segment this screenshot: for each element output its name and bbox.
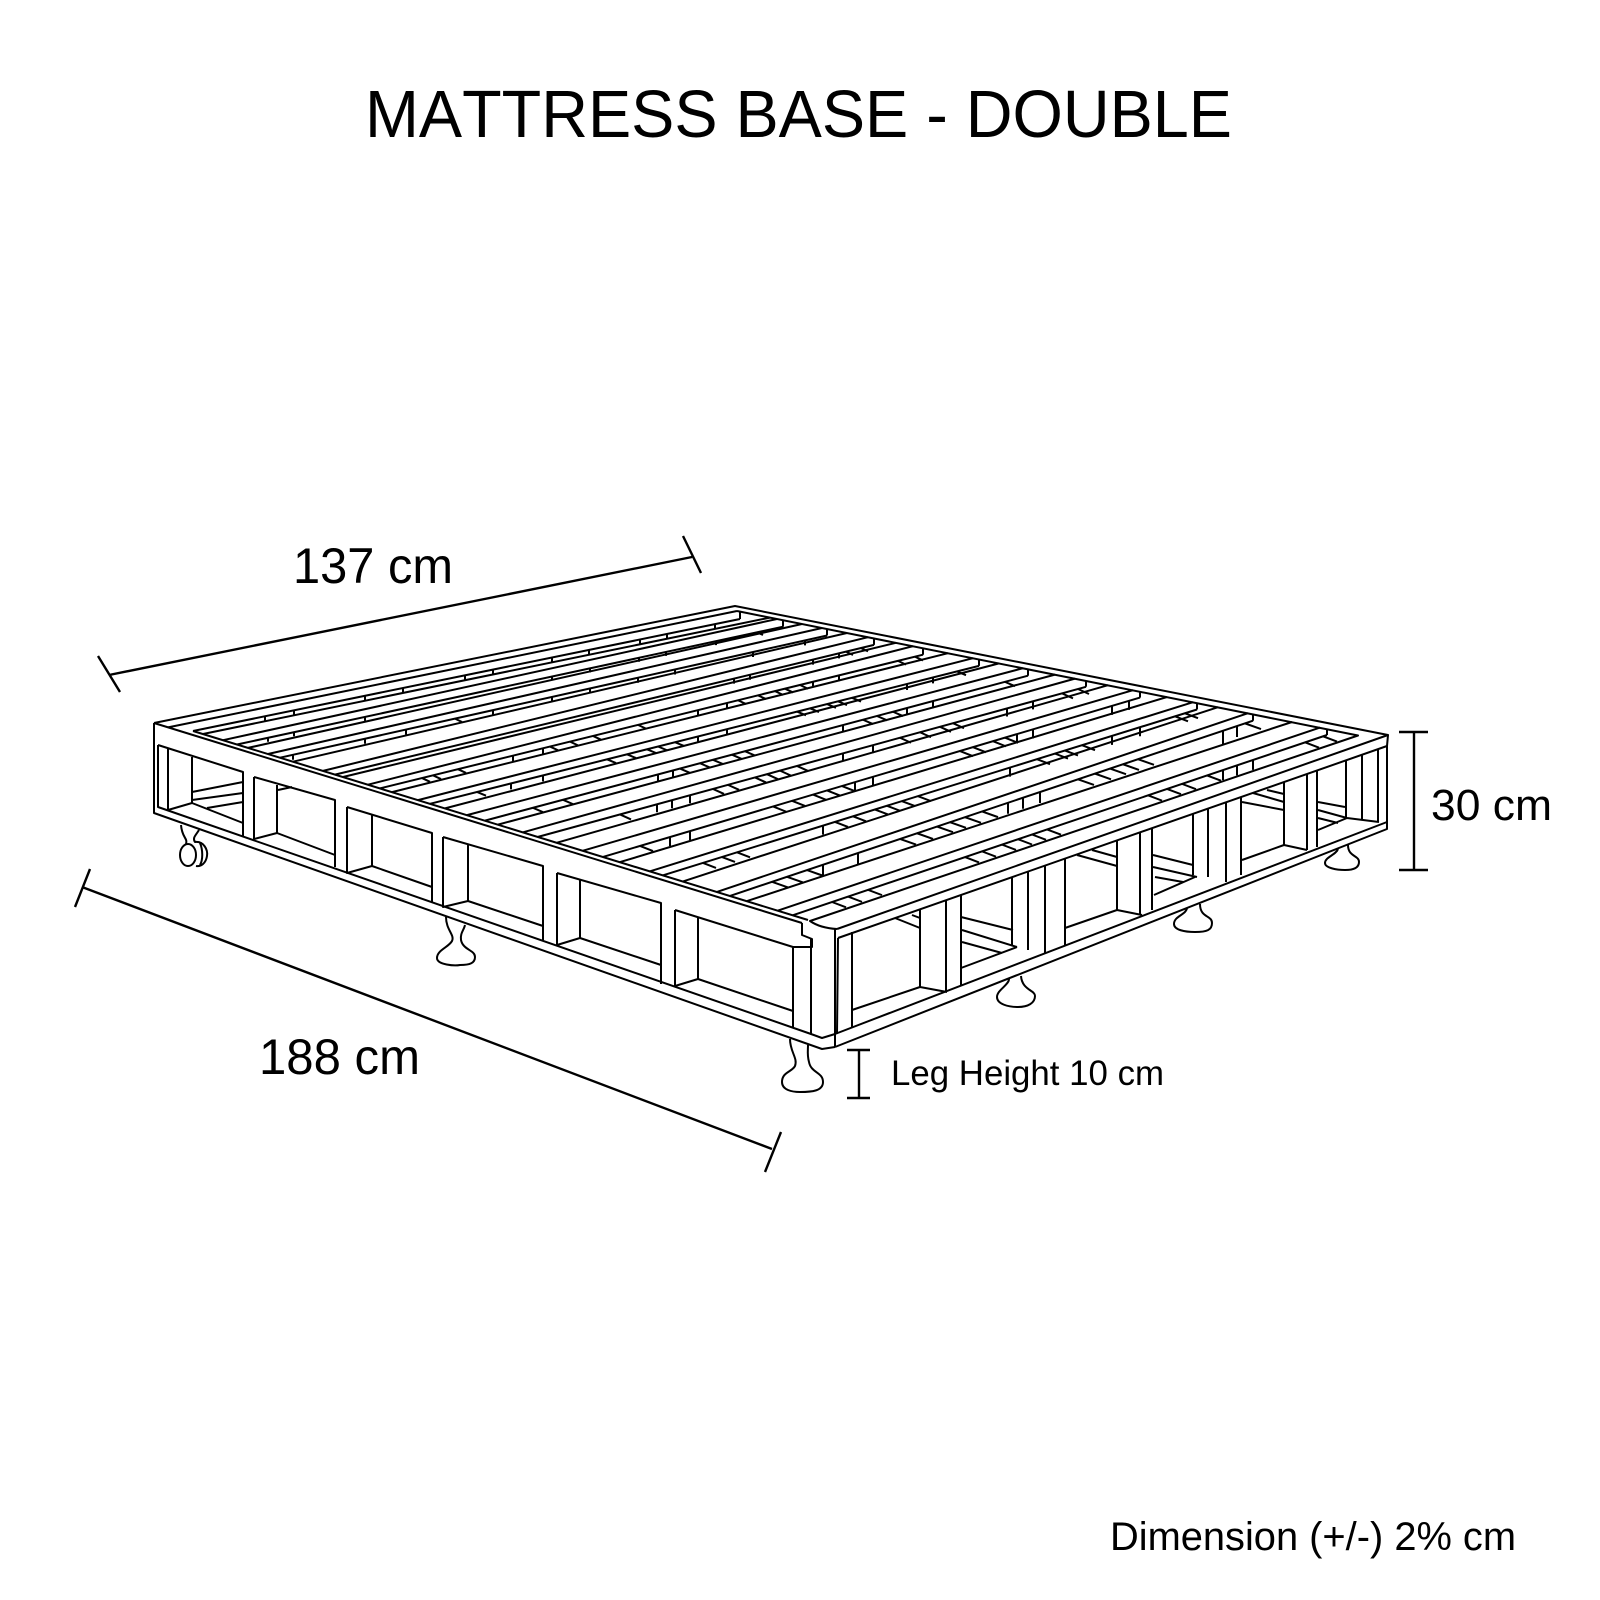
slat row 2 (223, 619, 802, 748)
slat row 8 (523, 679, 1108, 843)
leg: left side (437, 917, 475, 965)
slat row 4 (323, 637, 896, 777)
length label: 188 cm (259, 1029, 420, 1085)
height dimension line (1399, 732, 1428, 870)
title: MATTRESS BASE - DOUBLE (365, 77, 1232, 152)
slat row 3 (268, 628, 847, 762)
front corner post (793, 923, 838, 1047)
leg: right side middle (1174, 904, 1212, 932)
slat row 10 (650, 702, 1218, 881)
leg: right side near (997, 976, 1035, 1007)
leg height dimension line (847, 1050, 870, 1098)
leg height label: Leg Height 10 cm (891, 1054, 1164, 1093)
leg: front corner (782, 1039, 823, 1092)
dimension tolerance note: Dimension (+/-) 2% cm (1110, 1515, 1516, 1559)
caster wheel leg (180, 825, 207, 866)
slat row 11 (717, 713, 1292, 901)
width label: 137 cm (293, 538, 453, 594)
slat row 1 (168, 611, 770, 734)
right side panel with window openings (835, 735, 1388, 1047)
slat row 6 (418, 658, 999, 808)
width dimension line (98, 536, 701, 692)
slat row 7 (467, 668, 1055, 825)
length dimension line (75, 869, 781, 1172)
slat row 12 (778, 728, 1337, 915)
mattress base frame illustration (154, 606, 1388, 1092)
top surface outer frame and rails (154, 606, 1388, 929)
height label: 30 cm (1431, 781, 1552, 830)
left side panel with window openings (154, 723, 835, 1049)
leg: right side far (1325, 845, 1359, 870)
slat row 9 (583, 690, 1167, 862)
slat row 5 (368, 646, 948, 792)
